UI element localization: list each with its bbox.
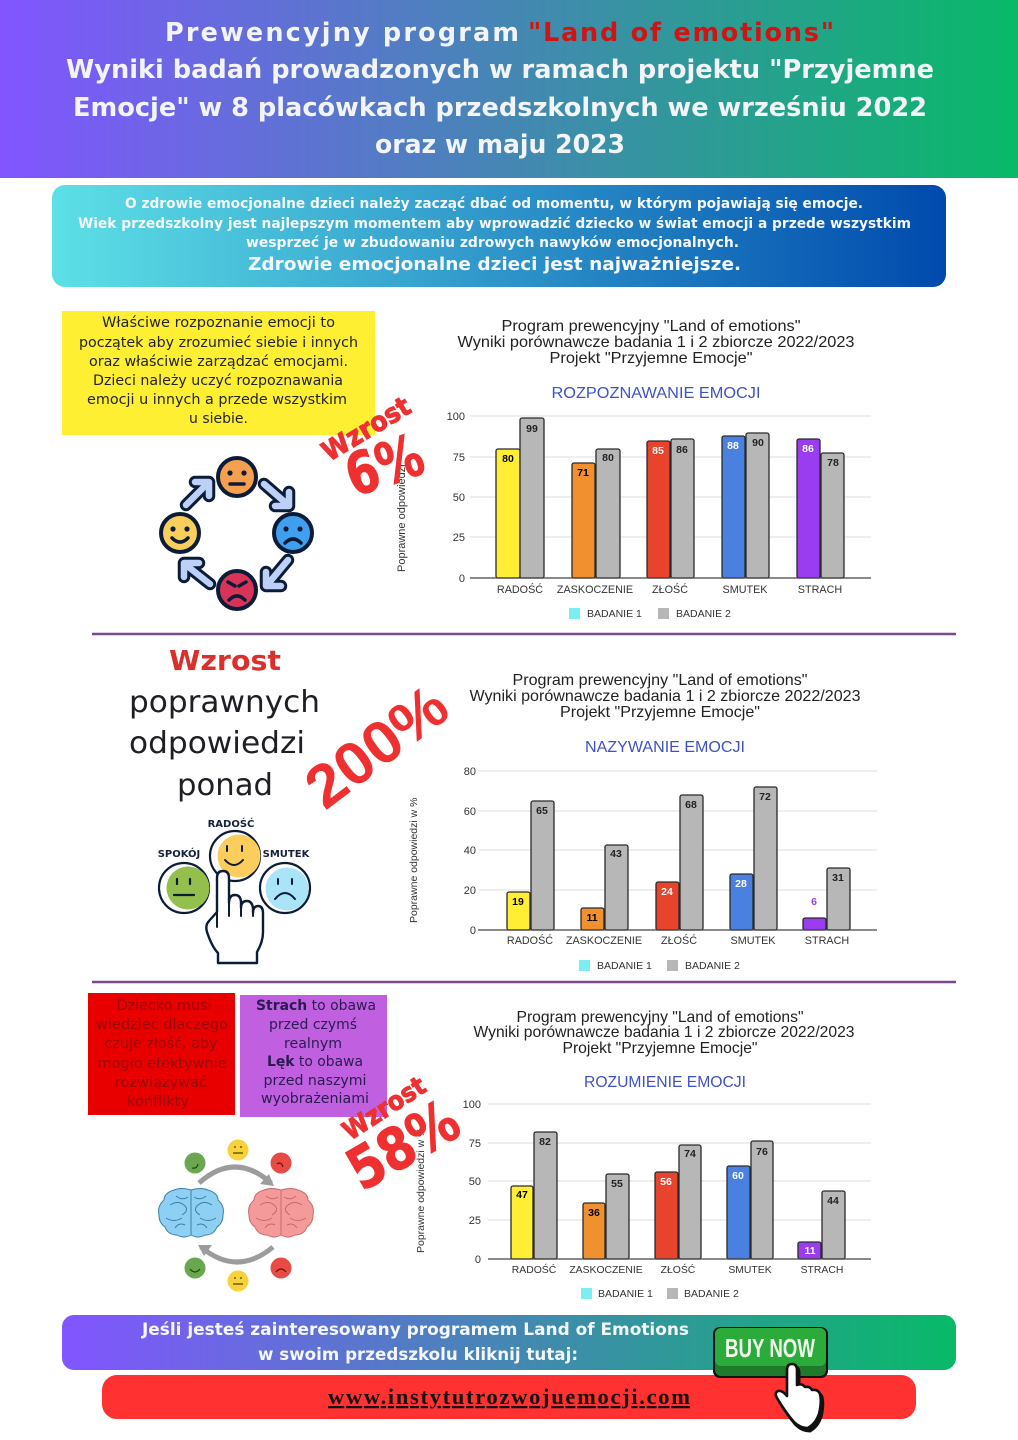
panel: yellow text box, recognising emotions: oraz właściwie zarządzać emocjami. <box>89 354 348 370</box>
panel: red text box, anger: wiedzieć dlaczego <box>96 1017 228 1033</box>
callout: growth 6% <box>317 391 432 510</box>
chart: recognising emotions: 100 <box>447 411 465 423</box>
intro panel: wesprzeć je w zbudowaniu zdrowych nawyków emocjonalnych. <box>246 235 739 251</box>
chart: naming emotions: Program prewencyjny "Land of emotions" <box>512 672 808 689</box>
panel: yellow text box, recognising emotions: początek aby zrozumieć siebie i innych <box>79 335 358 351</box>
chart: understanding emotions: 56 <box>660 1176 672 1188</box>
chart: naming emotions: 6 <box>811 896 817 908</box>
chart: understanding emotions: Program prewencyjny "Land of emotions" <box>516 1009 804 1026</box>
chart: recognising emotions: 75 <box>453 452 465 464</box>
chart: understanding emotions: BADANIE 2 <box>684 1288 739 1300</box>
chart: naming emotions: ZŁOŚĆ <box>661 934 697 947</box>
chart: naming emotions: 80 <box>464 766 476 778</box>
icon: choosing emotion with a hand <box>158 817 311 963</box>
chart: understanding emotions: 44 <box>827 1195 839 1207</box>
chart: understanding emotions: 47 <box>516 1189 528 1201</box>
chart: understanding emotions: 60 <box>732 1170 744 1182</box>
chart: naming emotions: BADANIE 2 <box>685 960 740 972</box>
chart: naming emotions: BADANIE 1 <box>597 960 652 972</box>
footer panel: call to action: w swoim przedszkolu kliknij tutaj: <box>258 1345 578 1365</box>
chart: understanding emotions: SMUTEK <box>728 1265 772 1276</box>
chart: recognising emotions <box>396 318 871 620</box>
panel: red text box, anger: rozwiązywać <box>115 1075 207 1091</box>
chart: naming emotions: 43 <box>610 848 622 860</box>
header: title banner: "Land of emotions" <box>528 18 834 48</box>
chart: naming emotions: Wyniki porównawcze badania 1 i 2 zbiorcze 2022/2023 <box>470 688 861 705</box>
panel: yellow text box, recognising emotions: u siebie. <box>189 411 248 427</box>
chart: naming emotions: 24 <box>661 886 673 898</box>
callout: growth 58%: 58% <box>335 1086 471 1204</box>
icon: buy now button with pointer: BUY NOW <box>725 1333 815 1363</box>
chart: recognising emotions: BADANIE 1 <box>587 608 642 620</box>
chart: understanding emotions <box>415 1009 871 1300</box>
panel: correct answers text <box>129 644 320 803</box>
chart: recognising emotions: 85 <box>652 445 664 457</box>
chart: naming emotions: 28 <box>735 878 747 890</box>
header: title banner: Prewencyjny program <box>165 18 519 48</box>
callout: growth 200%: 200% <box>293 672 461 821</box>
chart: recognising emotions: Projekt "Przyjemne Emocje" <box>550 350 752 367</box>
chart: recognising emotions: 86 <box>802 443 814 455</box>
panel: correct answers text: ponad <box>177 768 273 803</box>
chart: understanding emotions: 50 <box>469 1176 481 1188</box>
icon: choosing emotion with a hand: RADOŚĆ <box>208 817 254 830</box>
chart: naming emotions: RADOŚĆ <box>507 934 553 947</box>
chart: recognising emotions: STRACH <box>798 584 842 596</box>
chart: naming emotions: 20 <box>464 885 476 897</box>
chart: naming emotions: SMUTEK <box>730 935 776 947</box>
chart: naming emotions: 31 <box>832 872 844 884</box>
chart: understanding emotions: 11 <box>804 1245 816 1257</box>
chart: understanding emotions: 82 <box>539 1136 551 1148</box>
chart: naming emotions: Poprawne odpowiedzi w % <box>408 798 420 923</box>
intro panel <box>52 185 946 287</box>
chart: recognising emotions: 78 <box>827 457 839 469</box>
chart: understanding emotions: RADOŚĆ <box>512 1263 557 1276</box>
panel: purple text box, fear and anxiety <box>240 995 387 1117</box>
chart: recognising emotions: 0 <box>459 573 465 585</box>
chart: recognising emotions: Poprawne odpowiedzi <box>396 464 408 572</box>
chart: understanding emotions: 25 <box>469 1215 481 1227</box>
chart: recognising emotions: 88 <box>727 440 739 452</box>
header: title banner <box>0 0 1018 178</box>
chart: naming emotions: 68 <box>685 799 697 811</box>
chart: recognising emotions: Wyniki porównawcze badania 1 i 2 zbiorcze 2022/2023 <box>458 334 855 351</box>
panel: red text box, anger <box>88 993 235 1115</box>
callout: growth 6%: Wzrost <box>317 391 417 468</box>
chart: understanding emotions: ZŁOŚĆ <box>661 1263 696 1276</box>
chart: naming emotions: NAZYWANIE EMOCJI <box>585 739 745 756</box>
chart: understanding emotions: ROZUMIENIE EMOCJI <box>584 1074 746 1091</box>
chart: naming emotions: 65 <box>536 805 548 817</box>
footer panel: website link <box>102 1375 916 1419</box>
chart: recognising emotions: 90 <box>752 437 764 449</box>
panel: yellow text box, recognising emotions: Właściwe rozpoznanie emocji to <box>102 315 335 331</box>
chart: understanding emotions: 0 <box>475 1254 481 1266</box>
chart: understanding emotions: 36 <box>588 1207 600 1219</box>
chart: naming emotions: Projekt "Przyjemne Emocje" <box>560 704 760 721</box>
header: title banner: oraz w maju 2023 <box>375 130 625 160</box>
chart: understanding emotions: 75 <box>469 1138 481 1150</box>
callout: growth 58%: Wzrost <box>337 1071 432 1147</box>
chart: understanding emotions: Projekt "Przyjemne Emocje" <box>562 1040 758 1057</box>
footer panel: website link: www.instytutrozwojuemocji.com <box>328 1384 690 1409</box>
panel: red text box, anger: czuje złość, aby <box>104 1036 218 1052</box>
chart: naming emotions <box>408 672 877 972</box>
panel: yellow text box, recognising emotions: emocji u innych a przede wszystkim <box>87 392 347 408</box>
chart: recognising emotions: 25 <box>453 532 465 544</box>
footer panel: call to action <box>62 1315 956 1370</box>
panel: purple text box, fear and anxiety: przed naszymi <box>264 1073 366 1089</box>
chart: recognising emotions: SMUTEK <box>722 584 768 596</box>
chart: understanding emotions: Wyniki porównawcze badania 1 i 2 zbiorcze 2022/2023 <box>474 1024 855 1041</box>
panel: purple text box, fear and anxiety: przed czymś <box>269 1017 357 1033</box>
intro panel: Zdrowie emocjonalne dzieci jest najważniejsze. <box>248 254 741 275</box>
intro panel: Wiek przedszkolny jest najlepszym momentem aby wprowadzić dziecko w świat emocji a przede wszystkim <box>78 216 911 232</box>
panel: red text box, anger: Dziecko musi <box>116 998 212 1014</box>
icon: choosing emotion with a hand: SMUTEK <box>263 849 311 860</box>
chart: recognising emotions: Program prewencyjny "Land of emotions" <box>502 318 800 335</box>
icon: emotion cycle with arrows <box>161 458 312 609</box>
panel: purple text box, fear and anxiety: realnym <box>284 1036 342 1052</box>
panel: purple text box, fear and anxiety: Strach to obawa <box>256 998 376 1014</box>
chart: naming emotions: ZASKOCZENIE <box>566 935 642 947</box>
chart: recognising emotions: 99 <box>526 423 538 435</box>
chart: recognising emotions: ZASKOCZENIE <box>557 584 633 596</box>
panel: yellow text box, recognising emotions <box>62 311 375 435</box>
chart: naming emotions: 0 <box>470 925 476 937</box>
chart: naming emotions: 11 <box>586 912 598 924</box>
panel: purple text box, fear and anxiety: wyobrażeniami <box>261 1091 369 1107</box>
chart: naming emotions: 60 <box>464 806 476 818</box>
chart: recognising emotions: ZŁOŚĆ <box>652 583 688 596</box>
panel: red text box, anger: mogło efektywnie <box>98 1056 226 1072</box>
chart: understanding emotions: STRACH <box>801 1265 843 1276</box>
panel: red text box, anger: konflikty <box>127 1094 189 1110</box>
chart: naming emotions: 19 <box>512 896 524 908</box>
chart: naming emotions: 72 <box>759 791 771 803</box>
icon: brains and emotions <box>159 1140 313 1292</box>
chart: recognising emotions: 80 <box>502 453 514 465</box>
panel: correct answers text: poprawnych <box>129 685 320 720</box>
chart: recognising emotions: 71 <box>577 467 589 479</box>
header: title banner: Wyniki badań prowadzonych w ramach projektu "Przyjemne <box>66 55 934 85</box>
chart: recognising emotions: 50 <box>453 492 465 504</box>
panel: correct answers text: Wzrost <box>169 644 281 677</box>
chart: understanding emotions: 76 <box>756 1146 768 1158</box>
chart: recognising emotions: 80 <box>602 452 614 464</box>
chart: understanding emotions: 74 <box>684 1148 696 1160</box>
icon: choosing emotion with a hand: SPOKÓJ <box>158 847 200 860</box>
icon: buy now button with pointer <box>713 1327 828 1431</box>
header: title banner: Emocje" w 8 placówkach przedszkolnych we wrześniu 2022 <box>73 93 927 123</box>
chart: naming emotions: 40 <box>464 845 476 857</box>
chart: recognising emotions: RADOŚĆ <box>497 583 543 596</box>
panel: correct answers text: odpowiedzi <box>129 726 305 761</box>
chart: naming emotions: STRACH <box>805 935 849 947</box>
chart: understanding emotions: 55 <box>611 1178 623 1190</box>
footer panel: call to action: Jeśli jesteś zainteresowany programem Land of Emotions <box>141 1320 689 1340</box>
chart: understanding emotions: ZASKOCZENIE <box>569 1265 643 1276</box>
panel: purple text box, fear and anxiety: Lęk to obawa <box>267 1054 363 1070</box>
chart: recognising emotions: ROZPOZNAWANIE EMOCJI <box>552 385 760 402</box>
chart: recognising emotions: BADANIE 2 <box>676 608 731 620</box>
chart: recognising emotions: 86 <box>676 444 688 456</box>
chart: understanding emotions: Poprawne odpowiedzi w % <box>415 1128 427 1253</box>
chart: understanding emotions: 100 <box>463 1099 481 1111</box>
intro panel: O zdrowie emocjonalne dzieci należy zacząć dbać od momentu, w którym pojawiają się emocje. <box>125 196 863 212</box>
callout: growth 6%: 6% <box>336 421 432 510</box>
panel: yellow text box, recognising emotions: Dzieci należy uczyć rozpoznawania <box>93 373 343 389</box>
chart: understanding emotions: BADANIE 1 <box>598 1288 653 1300</box>
